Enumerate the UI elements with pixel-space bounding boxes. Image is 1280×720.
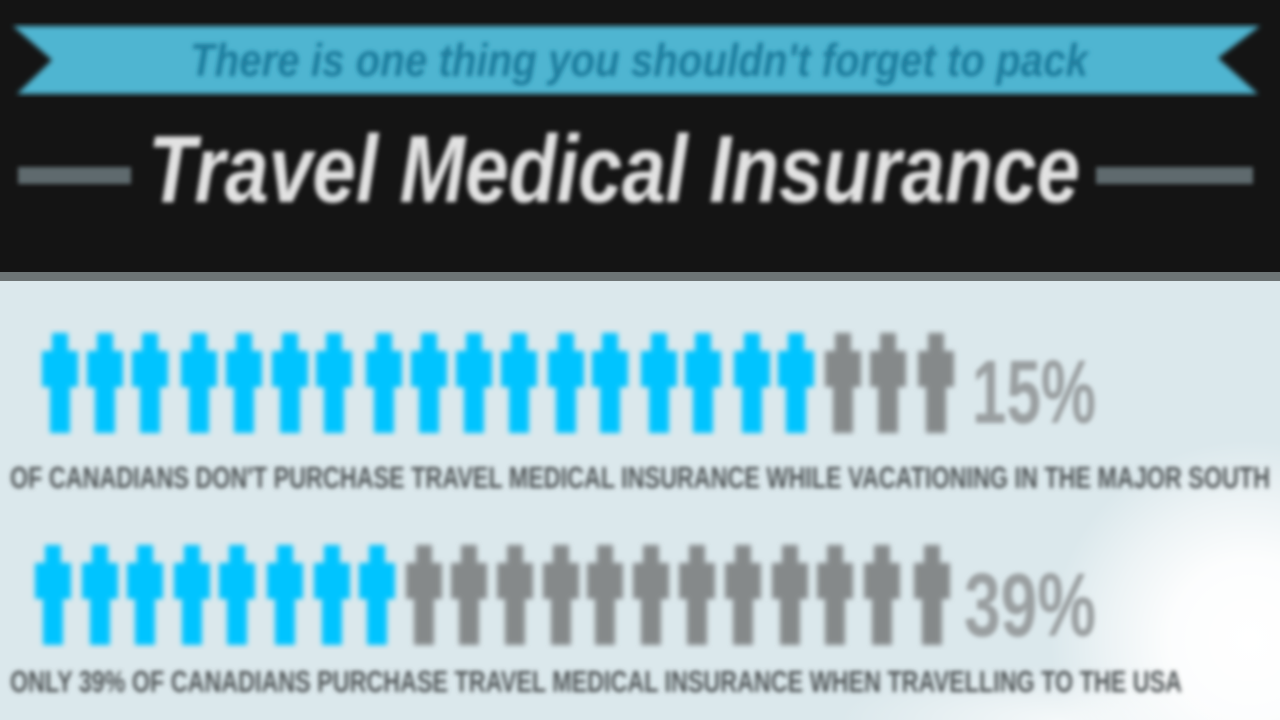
stat: 15%: 15%	[972, 343, 1096, 443]
panel: statistics background	[0, 281, 1280, 720]
pictogram row: 39 percent	[35, 545, 950, 645]
banner text: There is one thing you shouldn't forget to pack	[190, 34, 1090, 86]
ribbon banner	[13, 26, 1260, 94]
title: Travel Medical Insurance	[148, 116, 1080, 223]
pictogram row: 15 percent	[42, 333, 954, 433]
stat: 39%: 39%	[964, 556, 1096, 656]
panel: dark header	[0, 0, 1280, 281]
